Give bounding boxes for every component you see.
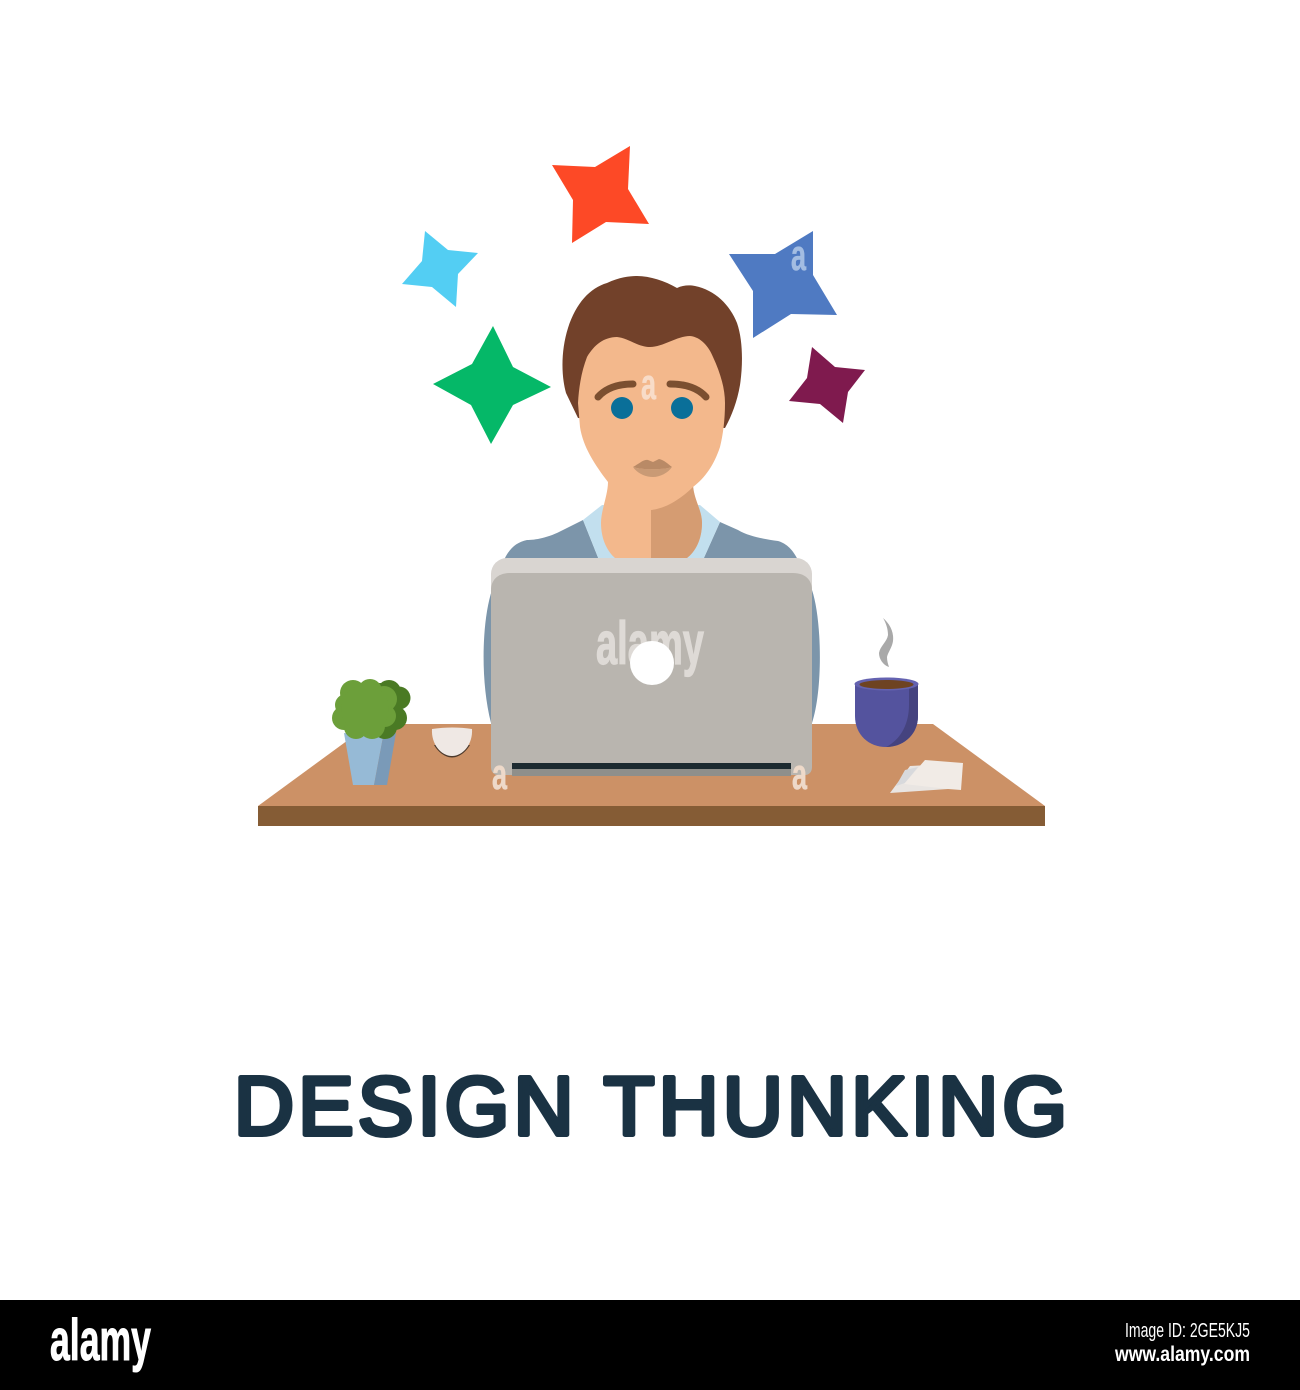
neck shadow — [651, 485, 702, 558]
watermark letter bottom right: a — [792, 750, 807, 799]
icon: paper sheets — [890, 760, 963, 793]
watermark: alamy: alamy — [596, 610, 704, 677]
illustration: desk — [258, 724, 1045, 826]
icon: blue star: a — [791, 231, 806, 280]
eyebrows — [598, 384, 706, 397]
icon: blue star — [729, 231, 837, 338]
icon: coffee mug with steam — [854, 618, 918, 747]
website: www.alamy.com — [1114, 1343, 1250, 1366]
watermark letter bottom left: a — [492, 750, 507, 799]
jacket body and arms — [484, 520, 820, 723]
face — [578, 336, 725, 510]
title: DESIGN THUNKING — [234, 1060, 1067, 1152]
illustration: laptop — [491, 558, 812, 776]
icon: cyan star — [402, 231, 478, 307]
icon: red star — [552, 146, 649, 243]
icon: purple star — [789, 347, 865, 423]
neck — [601, 482, 702, 558]
laptop logo circle — [630, 641, 674, 685]
footer logo: alamy — [50, 1308, 151, 1373]
icon: green star — [433, 326, 551, 444]
hair — [562, 276, 742, 428]
icon: potted plant — [332, 679, 410, 785]
footer bar — [0, 1300, 1300, 1390]
illustration: person — [484, 276, 820, 723]
watermark letter on forehead: a — [641, 360, 656, 409]
shirt collar — [583, 505, 720, 560]
image id: Image ID: 2GE5KJ5 — [1125, 1320, 1250, 1342]
icon: small white cup — [432, 728, 472, 758]
eyes — [611, 397, 693, 419]
mouth — [633, 459, 672, 477]
